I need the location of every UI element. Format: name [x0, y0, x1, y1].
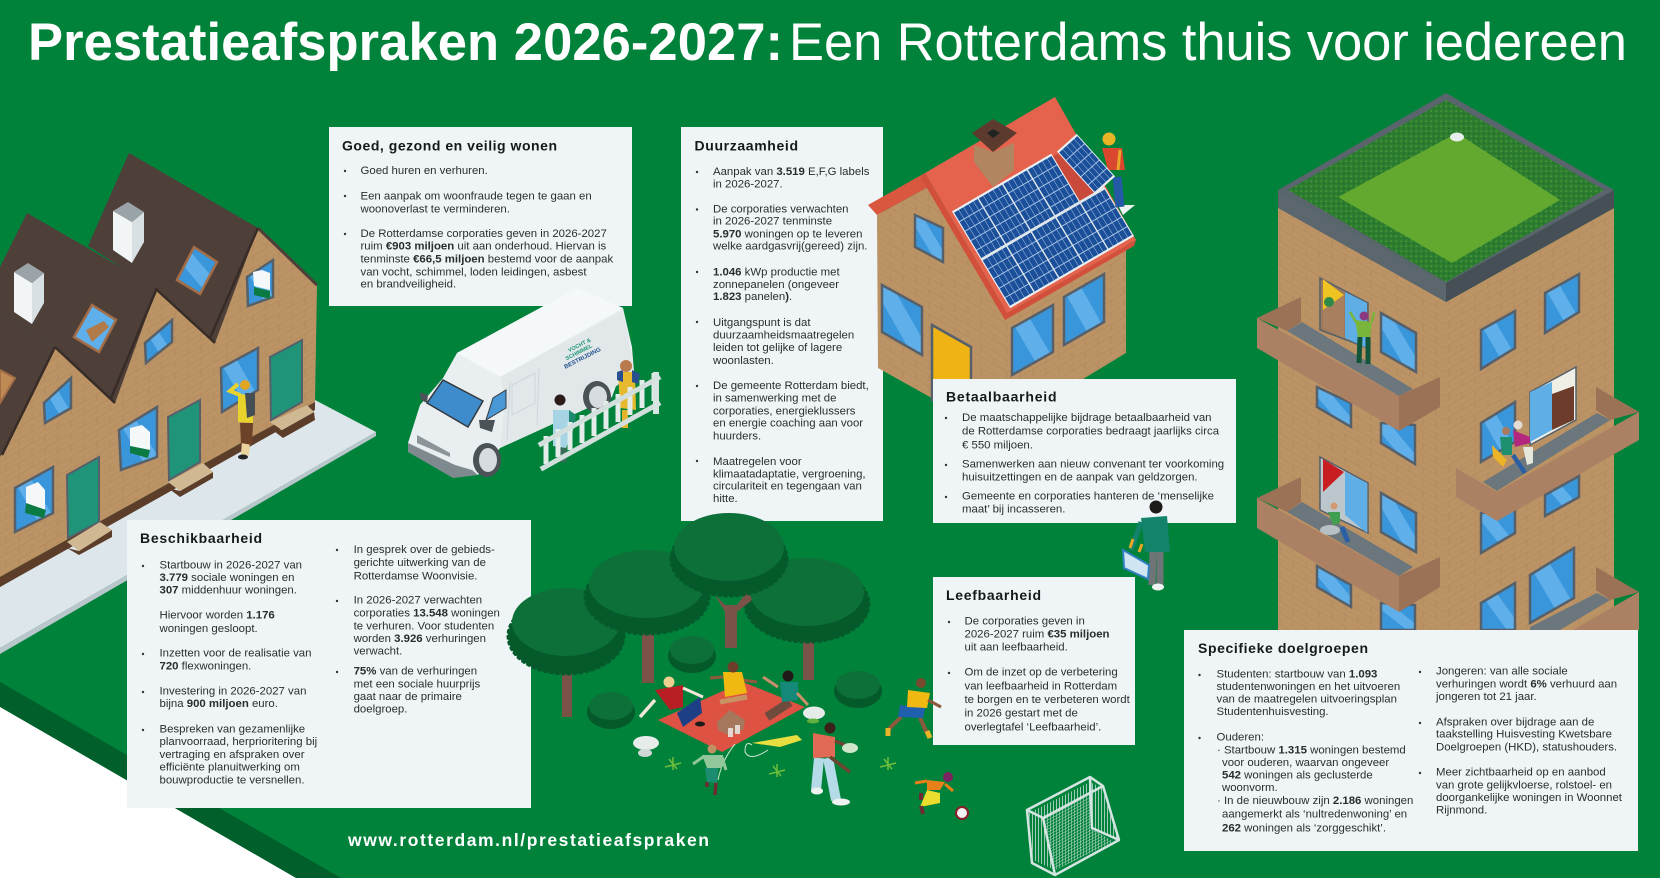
fence — [541, 372, 658, 468]
lawn — [1338, 133, 1560, 263]
panel: specifieke doelgroepen: studentenwoningen en het uitvoeren — [1216, 681, 1400, 693]
solar array — [953, 140, 1133, 307]
van lettering: VOCHT & — [567, 337, 592, 354]
title: Een Rotterdams thuis voor iedereen — [789, 13, 1627, 72]
panel: duurzaamheid: woonlasten. — [712, 355, 774, 367]
side window — [486, 390, 506, 420]
panel: beschikbaarheid: 75% van de verhuringen — [354, 666, 477, 678]
panel: duurzaamheid: welke aardgasvrij(gereed) zijn. — [712, 240, 867, 252]
panel: leefbaarheid: De corporaties geven in — [964, 616, 1085, 628]
panel: duurzaamheid: klimaatadaptatie, vergroening, — [713, 468, 866, 480]
panel: beschikbaarheid: gaat naar de primaire — [354, 691, 462, 703]
illustration: white van — [408, 288, 634, 478]
panel: goed, gezond en veilig wonen: De Rotterdamse corporaties geven in 2026-2027 — [360, 228, 607, 240]
panel: duurzaamheid: duurzaamheidsmaatregelen — [713, 330, 854, 342]
bush — [668, 636, 716, 673]
panel: leefbaarheid — [933, 577, 1135, 745]
panel: beschikbaarheid: In gesprek over de gebieds- — [354, 544, 495, 556]
panel: duurzaamheid: Duurzaamheid — [694, 138, 798, 154]
football — [956, 807, 968, 819]
elderly couple — [1492, 420, 1533, 473]
panel: duurzaamheid: 5.970 woningen op te leveren — [713, 228, 862, 240]
panel: beschikbaarheid: Rotterdamse Woonvisie. — [354, 570, 477, 582]
panel: beschikbaarheid: met een sociale huurprijs — [354, 678, 481, 690]
panel: duurzaamheid: De corporaties verwachten — [713, 204, 848, 216]
roof: third house — [88, 153, 258, 343]
panel: specifieke doelgroepen: Doelgroepen (HKD), statushouders. — [1436, 742, 1617, 754]
panel: duurzaamheid: en energie coaching aan voor — [713, 418, 863, 430]
panel: leefbaarheid: Om de inzet op de verbetering — [964, 666, 1118, 678]
illustration: trees — [508, 513, 882, 729]
roof ornament — [1450, 132, 1464, 142]
panel: goed, gezond en veilig wonen: Een aanpak om woonfraude tegen te gaan en — [360, 190, 592, 202]
kite — [718, 735, 802, 780]
panel: duurzaamheid: De gemeente Rotterdam biedt, — [713, 380, 869, 392]
panel: beschikbaarheid: worden 3.926 verhuringen — [353, 633, 486, 645]
roof worker — [1102, 132, 1125, 207]
girl in yellow dress — [710, 662, 757, 702]
balcony middle right — [1456, 387, 1639, 521]
panel: duurzaamheid: huurders. — [713, 430, 761, 442]
balcony lower right — [1530, 567, 1639, 630]
woman in teal — [763, 670, 808, 717]
panel: duurzaamheid: 1.823 panelen). — [713, 291, 792, 303]
door — [168, 400, 200, 480]
roof window — [177, 247, 217, 294]
person in wheelchair — [1320, 502, 1348, 542]
panel: specifieke doelgroepen: voor ouderen, waarvan ongeveer — [1222, 757, 1389, 769]
panel: specifieke doelgroepen: Studentenhuisvesting. — [1216, 706, 1329, 718]
panel: specifieke doelgroepen: Afspraken over bijdrage aan de — [1436, 716, 1594, 728]
illustration: child with football — [915, 772, 968, 819]
illustration: workers with fence — [541, 360, 658, 468]
window — [145, 320, 172, 363]
door step — [67, 522, 112, 555]
panel: beschikbaarheid: vertraging en afspraken over — [160, 749, 305, 761]
panel: goed, gezond en veilig wonen: tenminste €66,5 miljoen bestemd voor de aanpak — [360, 254, 613, 266]
illustration: tower with green roof — [1257, 93, 1639, 630]
door — [67, 457, 99, 538]
panel: specifieke doelgroepen: verhuringen wordt 6% verhuurd aan — [1436, 678, 1617, 690]
panel: duurzaamheid: in 2026-2027 tenminste — [713, 216, 832, 228]
panel: duurzaamheid: Aanpak van 3.519 E,F,G labels — [713, 166, 870, 178]
panel: specifieke doelgroepen: doorgankelijke woningen in Woonnet — [1436, 792, 1623, 804]
front bumper — [408, 443, 478, 478]
panel: duurzaamheid: Maatregelen voor — [713, 456, 802, 468]
panel: beschikbaarheid: Hiervoor worden 1.176 — [160, 610, 275, 622]
panel: betaalbaarheid: huisuitzettingen en de aanpak van geldzorgen. — [962, 472, 1198, 484]
panel: specifieke doelgroepen — [1184, 630, 1638, 851]
illustration: man with frisbee — [811, 722, 858, 806]
sidewalk — [0, 400, 376, 654]
panel: betaalbaarheid: € 550 miljoen. — [962, 440, 1033, 452]
panel: duurzaamheid: circulariteit en tegengaan van — [713, 480, 862, 492]
panel: goed, gezond en veilig wonen: woonoverlast te verminderen. — [360, 204, 510, 216]
panel: specifieke doelgroepen: jongeren tot 21 jaar. — [1435, 691, 1537, 703]
chimney — [14, 263, 44, 324]
panel: beschikbaarheid: te verhuren. Voor studenten — [354, 620, 494, 632]
loose solar panel — [1058, 135, 1114, 193]
panel: betaalbaarheid: maat’ bij incasseren. — [962, 504, 1065, 516]
front wheel — [473, 443, 501, 477]
panel: betaalbaarheid — [933, 379, 1236, 523]
panel: specifieke doelgroepen: 262 woningen als ‘zorggeschikt’. — [1222, 822, 1386, 834]
van lettering: SCHIMMEL — [565, 343, 594, 362]
panel: specifieke doelgroepen: van de maatregelen uitvoeringsplan — [1216, 694, 1397, 706]
panel: specifieke doelgroepen: Ouderen: — [1216, 732, 1264, 744]
panel: beschikbaarheid: verwacht. — [354, 646, 402, 658]
roof: second house — [0, 213, 157, 403]
mushroom stool — [803, 706, 825, 724]
panel: leefbaarheid: Leefbaarheid — [946, 587, 1041, 603]
person on balcony — [1350, 312, 1374, 364]
panel: goed, gezond en veilig wonen: van vocht, schimmel, loden leidingen, asbest — [360, 266, 587, 278]
worker in overalls — [617, 360, 640, 428]
illustration: row of houses — [0, 153, 317, 587]
tower windows — [1317, 274, 1579, 630]
title: Prestatieafspraken 2026-2027: — [28, 13, 783, 72]
balcony door upper left — [1320, 278, 1368, 348]
panel: duurzaamheid: hitte. — [713, 493, 738, 505]
panel: specifieke doelgroepen: · In de nieuwbouw zijn 2.186 woningen — [1217, 795, 1413, 807]
rear wheel — [583, 381, 611, 413]
panel: beschikbaarheid: corporaties 13.548 woningen — [354, 608, 500, 620]
panel: beschikbaarheid: 307 middenhuur woningen. — [160, 584, 297, 596]
grille — [417, 435, 450, 457]
illustration: woman with shopping bag — [1123, 500, 1170, 590]
panel: leefbaarheid: van leefbaarheid in Rotterdam — [964, 680, 1117, 692]
panel: specifieke doelgroepen: Specifieke doelgroepen — [1198, 640, 1368, 656]
panel: beschikbaarheid — [127, 520, 531, 808]
panel: duurzaamheid: zonnepanelen (ongeveer — [713, 279, 839, 291]
side windows — [882, 215, 1104, 375]
gable edge — [258, 228, 317, 285]
tree 4 — [745, 558, 869, 680]
panel: beschikbaarheid: Bespreken van gezamenlijke — [160, 724, 305, 736]
panel: goed, gezond en veilig wonen: Goed huren en verhuren. — [360, 165, 488, 177]
panel: specifieke doelgroepen: van grote gelijkvloerse, rolstoel- en — [1436, 780, 1612, 792]
sedum roof — [1288, 100, 1604, 282]
ground edge strip — [0, 682, 341, 878]
panel: betaalbaarheid: Betaalbaarheid — [946, 388, 1056, 404]
panel: leefbaarheid: overlegtafel ‘Leefbaarheid’. — [964, 722, 1101, 734]
panel: specifieke doelgroepen: Meer zichtbaarheid op en aanbod — [1436, 766, 1606, 778]
panel: betaalbaarheid: De maatschappelijke bijdrage betaalbaarheid van — [962, 412, 1212, 424]
panel: beschikbaarheid: Investering in 2026-2027 van — [160, 686, 306, 698]
mirrors — [420, 392, 495, 432]
tree 3 — [671, 513, 787, 648]
bush — [587, 692, 635, 729]
illustration: child playing — [888, 678, 941, 738]
roof fascia — [2, 228, 258, 455]
window with sign — [247, 260, 273, 306]
panel: specifieke doelgroepen: · Startbouw 1.315 woningen bestemd — [1217, 744, 1406, 756]
panel: leefbaarheid: uit aan leefbaarheid. — [964, 642, 1068, 654]
van door outline — [507, 368, 539, 440]
panel: beschikbaarheid: doelgroep. — [354, 704, 407, 716]
panel: beschikbaarheid: Startbouw in 2026-2027 van — [160, 560, 302, 572]
panel: beschikbaarheid: bijna 900 miljoen euro. — [160, 698, 278, 710]
man in red shirt — [640, 676, 705, 727]
panel: specifieke doelgroepen: Jongeren: van alle sociale — [1436, 666, 1568, 678]
door — [270, 340, 302, 420]
panel: beschikbaarheid: woningen gesloopt. — [158, 623, 258, 635]
panel: goed, gezond en veilig wonen: en brandveiligheid. — [360, 278, 456, 290]
panel: goed, gezond en veilig wonen: ruim €903 miljoen uit aan onderhoud. Hiervan is — [360, 240, 606, 252]
grass tufts — [665, 757, 896, 777]
balcony door middle right — [1530, 367, 1576, 445]
balcony upper left — [1257, 297, 1440, 431]
panel: beschikbaarheid: bouwproductie te versnellen. — [160, 774, 305, 786]
window — [221, 348, 258, 412]
panel: beschikbaarheid: In 2026-2027 verwachten — [354, 594, 482, 606]
mushroom stool — [633, 736, 659, 757]
bush — [834, 671, 882, 708]
van lettering — [558, 335, 603, 371]
panel: duurzaamheid — [681, 127, 883, 521]
roof window with desk — [74, 305, 116, 352]
panel: beschikbaarheid: Beschikbaarheid — [140, 530, 262, 546]
walls — [1278, 205, 1446, 630]
panel: betaalbaarheid: Samenwerken aan nieuw convenant ter voorkoming — [962, 458, 1224, 470]
panel: beschikbaarheid: gerichte uitwerking van de — [354, 557, 486, 569]
panel: beschikbaarheid: planvoorraad, herprioritering bij — [160, 736, 317, 748]
tree 2 — [585, 550, 709, 683]
illustration: house with solar panels — [868, 97, 1136, 440]
window — [44, 378, 71, 423]
panel: goed, gezond en veilig wonen — [329, 127, 632, 306]
panel: leefbaarheid: in 2026 gestart met de — [964, 708, 1078, 720]
panel: leefbaarheid: 2026-2027 ruim €35 miljoen — [964, 628, 1110, 640]
title — [28, 13, 1627, 72]
bottles — [728, 725, 740, 737]
person at door — [230, 380, 255, 460]
panel: duurzaamheid: 1.046 kWp productie met — [713, 266, 840, 278]
door — [932, 325, 971, 400]
blanket — [658, 682, 805, 752]
picnic basket — [717, 710, 745, 735]
panel: betaalbaarheid: de Rotterdamse corporaties bedraagt jaarlijks circa — [962, 426, 1220, 438]
parapet — [1278, 190, 1446, 302]
panel: specifieke doelgroepen: aangemerkt als ‘nultredenwoning’ en — [1222, 808, 1407, 820]
walls — [877, 187, 1007, 440]
illustration: football goal — [1027, 777, 1119, 875]
panel: beschikbaarheid: 3.779 sociale woningen en — [160, 572, 294, 584]
window with sign — [119, 407, 157, 470]
tree 1 — [508, 588, 624, 717]
windshield — [427, 380, 483, 427]
panel: duurzaamheid: Uitgangspunt is dat — [713, 317, 811, 329]
red roof — [925, 97, 1136, 313]
door step — [168, 463, 213, 497]
panel: specifieke doelgroepen: 542 woningen als geclusterde — [1222, 770, 1373, 782]
chimney — [972, 119, 1017, 187]
van lettering: BESTRIJDING — [564, 347, 603, 371]
roof window with desk — [0, 370, 15, 403]
panel: leefbaarheid: te borgen en te verbeteren wordt — [964, 694, 1131, 706]
panel: specifieke doelgroepen: woonvorm. — [1221, 782, 1278, 794]
child in green — [693, 744, 726, 795]
panel: specifieke doelgroepen: Rijnmond. — [1436, 804, 1487, 816]
panel: beschikbaarheid: Inzetten voor de realisatie van — [160, 648, 311, 660]
balcony lower left — [1257, 477, 1440, 612]
chimney — [113, 202, 144, 263]
worker platform — [1118, 205, 1135, 215]
panel: specifieke doelgroepen: Studenten: startbouw van 1.093 — [1216, 668, 1377, 680]
panel: beschikbaarheid: 720 flexwoningen. — [160, 660, 251, 672]
panel: duurzaamheid: corporaties, energieklussers — [713, 406, 856, 418]
worker in apron — [553, 394, 576, 462]
panel: goed, gezond en veilig wonen: Goed, gezond en veilig wonen — [342, 138, 557, 154]
website url: www.rotterdam.nl/prestatieafspraken — [347, 830, 709, 850]
roof: first house — [0, 313, 55, 457]
window with sign — [15, 467, 53, 532]
panel: betaalbaarheid: Gemeente en corporaties hanteren de ‘menselijke — [962, 490, 1214, 502]
panel: specifieke doelgroepen: taakstelling Huisvesting Kwetsbare — [1436, 728, 1612, 740]
door step — [270, 405, 315, 438]
balcony door lower left — [1320, 457, 1368, 533]
panel: duurzaamheid: in 2026-2027. — [713, 178, 783, 190]
panel: duurzaamheid: in samenwerking met de — [713, 392, 836, 404]
panel: beschikbaarheid: efficiënte planuitwerking om — [160, 762, 300, 774]
illustration: picnic — [633, 662, 896, 795]
panel: duurzaamheid: leiden tot gelijke of lagere — [713, 342, 842, 354]
